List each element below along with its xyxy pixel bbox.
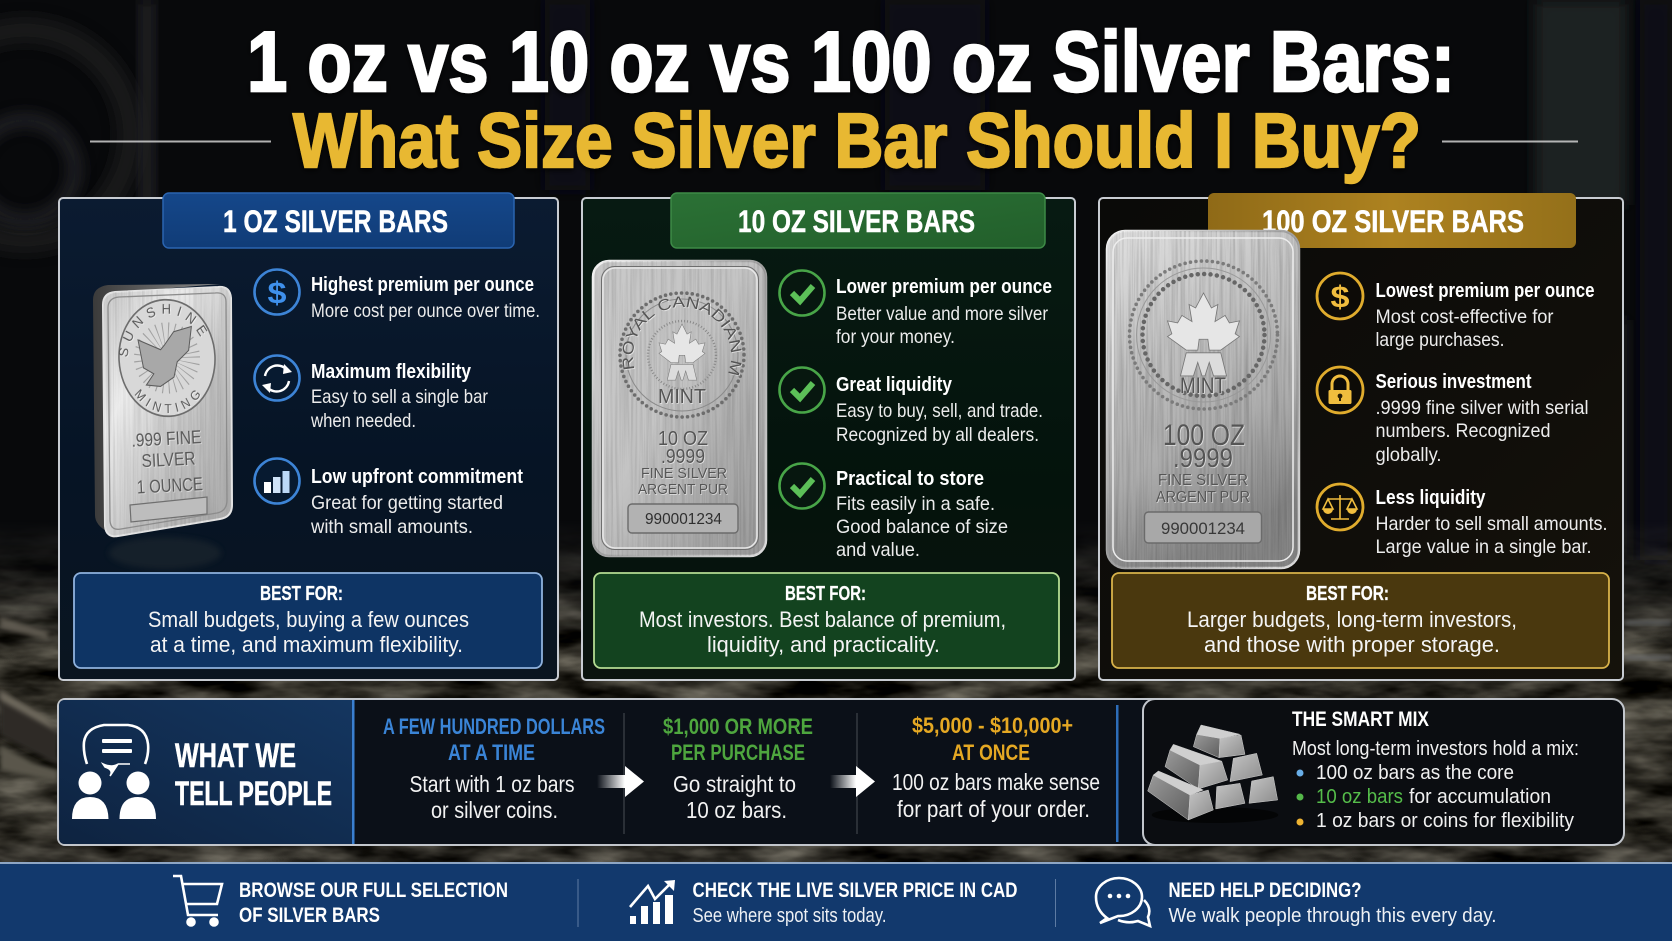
item: highest premium: More cost per ounce over time.: [311, 300, 540, 322]
icon: cart: [173, 876, 222, 926]
silver bar: 10 oz Royal Canadian Mint: .9999: [661, 446, 705, 468]
silver bar: 10 oz Royal Canadian Mint: [592, 260, 768, 558]
silver bar: 10 oz Royal Canadian Mint: 990001234: [645, 511, 722, 528]
footer: browse: BROWSE OUR FULL SELECTION: [239, 878, 508, 902]
arrow 1: [597, 766, 644, 797]
footer: live price: [630, 878, 1018, 927]
footer: live price: See where spot sits today.: [692, 905, 886, 927]
item: lowest premium: Lowest premium per ounce: [1376, 279, 1594, 302]
column: $1,000 or more: 10 oz bars.: [686, 797, 787, 823]
smart mix text: [1292, 707, 1579, 832]
item: practical to store: [780, 464, 1008, 561]
best for: 1 oz: [74, 573, 542, 668]
item: less liquidity: [1317, 484, 1608, 558]
best for: 100 oz: Larger budgets, long-term investors,: [1187, 607, 1517, 632]
item: practical to store: and value.: [836, 539, 920, 561]
silver bar: 10 oz Royal Canadian Mint: FINE SILVER: [641, 465, 727, 482]
silver bar: 1 oz Sunshine Minting: [93, 284, 233, 568]
best for: 100 oz: BEST FOR:: [1306, 582, 1389, 605]
panel heading: 100 oz: 100 OZ SILVER BARS: [1262, 203, 1524, 239]
item: lowest premium: $: [1330, 279, 1350, 314]
item: less liquidity: Less liquidity: [1376, 486, 1486, 509]
title line 1: 1 oz vs 10 oz vs 100 oz Silver Bars:: [247, 15, 1455, 110]
column: $5,000 - $10,000+: for part of your order.: [897, 796, 1090, 822]
item: lower premium: Lower premium per ounce: [836, 275, 1052, 298]
best for: 1 oz: BEST FOR:: [260, 582, 343, 605]
panel heading: 10 oz: [671, 193, 1045, 248]
item: serious investment: [1317, 367, 1588, 466]
column: few hundred dollars: or silver coins.: [431, 797, 558, 823]
smart mix text: 1 oz bars or coins for flexibility: [1316, 809, 1575, 832]
footer: browse: [173, 876, 508, 927]
item: lower premium: [780, 270, 1052, 348]
icon: stack of silver bars: [1148, 725, 1278, 823]
item: less liquidity: Large value in a single bar.: [1376, 536, 1592, 558]
item: low upfront commitment: Great for getting started: [311, 492, 503, 514]
smart mix text: Most long-term investors hold a mix:: [1292, 737, 1579, 760]
column: $1,000 or more: $1,000 OR MORE: [663, 714, 813, 739]
column: $5,000 - $10,000+: 100 oz bars make sense: [892, 769, 1100, 795]
best for: 10 oz: liquidity, and practicality.: [707, 632, 940, 657]
item: lowest premium: [1317, 273, 1594, 351]
item: great liquidity: Recognized by all dealers.: [836, 424, 1039, 446]
silver bar: 100 oz: FINE SILVER: [1158, 472, 1248, 489]
footer bar: [0, 862, 1672, 941]
column: $1,000 or more: PER PURCHASE: [671, 740, 805, 765]
best for: 10 oz: BEST FOR:: [785, 582, 866, 605]
footer: need help: We walk people through this every day.: [1168, 905, 1496, 927]
silver bar: 100 oz: 100 OZ: [1163, 419, 1245, 452]
item: highest premium: $: [268, 275, 286, 310]
arrow 2: [830, 766, 875, 797]
column: $5,000 - $10,000+: AT ONCE: [952, 740, 1030, 765]
item: practical to store: Fits easily in a safe.: [836, 493, 995, 515]
panel heading: 1 oz: [163, 193, 514, 248]
column: $1,000 or more: [663, 714, 813, 823]
item: less liquidity: Harder to sell small amounts.: [1376, 513, 1608, 535]
item: serious investment: .9999 fine silver with serial: [1376, 397, 1588, 419]
smart mix text: for accumulation: [1409, 785, 1551, 808]
item: maximum flexibility: Maximum flexibility: [311, 360, 472, 383]
panel: 1 oz silver bars: [58, 192, 559, 681]
what we tell people label: WHAT WE: [175, 737, 296, 775]
what we tell people strip: [58, 699, 1178, 845]
what we tell people label: [59, 700, 354, 844]
footer: live price: CHECK THE LIVE SILVER PRICE IN CAD: [692, 878, 1018, 902]
column: few hundred dollars: AT A TIME: [448, 740, 535, 765]
panel: the smart mix: [1143, 699, 1624, 845]
title line 2: What Size Silver Bar Should I Buy?: [293, 98, 1421, 184]
panel: 10 oz silver bars: [581, 192, 1076, 681]
silver bar: 10 oz Royal Canadian Mint: 10 OZ: [658, 428, 708, 450]
icon: chat bubbles: [1096, 878, 1150, 926]
panel heading: 10 oz: 10 OZ SILVER BARS: [738, 203, 975, 239]
silver bar: 100 oz: MINT: [1180, 373, 1226, 398]
silver bar: 100 oz: 990001234: [1161, 519, 1245, 538]
silver bar: 100 oz: .9999: [1173, 443, 1233, 473]
silver bar: 100 oz: ARGENT PUR: [1156, 489, 1250, 506]
item: great liquidity: Great liquidity: [836, 373, 953, 396]
item: highest premium: Highest premium per ounce: [311, 273, 534, 296]
best for: 1 oz: Small budgets, buying a few ounces: [148, 607, 469, 632]
item: serious investment: numbers. Recognized: [1376, 420, 1550, 442]
column: $1,000 or more: Go straight to: [673, 771, 796, 797]
silver bar: 1 oz Sunshine Minting: .999 FINE: [131, 427, 202, 451]
best for: 1 oz: at a time, and maximum flexibility.: [150, 632, 463, 657]
silver bar: 10 oz Royal Canadian Mint: ROYAL CANADIAN MINT: [622, 296, 742, 376]
item: maximum flexibility: when needed.: [310, 410, 416, 432]
panel heading: 100 oz: [1208, 193, 1576, 248]
item: great liquidity: Easy to buy, sell, and trade.: [836, 400, 1043, 422]
item: practical to store: Good balance of size: [836, 516, 1008, 538]
silver bar: 10 oz Royal Canadian Mint: ARGENT PUR: [638, 481, 728, 498]
best for: 10 oz: [594, 573, 1059, 668]
item: maximum flexibility: [254, 356, 488, 432]
column: $5,000 - $10,000+: $5,000 - $10,000+: [912, 713, 1073, 738]
best for: 10 oz: Most investors. Best balance of premium,: [639, 607, 1006, 632]
silver bar: 1 oz Sunshine Minting: MINTING: [134, 389, 200, 414]
column: few hundred dollars: [383, 714, 605, 823]
panel: 100 oz silver bars: [1099, 193, 1623, 680]
item: low upfront commitment: with small amounts.: [310, 516, 473, 538]
item: lower premium: for your money.: [836, 326, 955, 348]
column: $5,000 - $10,000+: [892, 713, 1100, 822]
item: low upfront commitment: [254, 458, 523, 538]
icon: people talking: [72, 725, 156, 819]
what we tell people label: TELL PEOPLE: [175, 775, 332, 813]
column: few hundred dollars: Start with 1 oz bars: [410, 771, 574, 797]
silver bar: 1 oz Sunshine Minting: SILVER: [141, 449, 196, 471]
item: great liquidity: [780, 368, 1043, 446]
item: lowest premium: large purchases.: [1376, 329, 1504, 351]
best for: 100 oz: [1112, 573, 1609, 668]
smart mix text: 10 oz bars: [1316, 785, 1403, 808]
footer: browse: OF SILVER BARS: [239, 903, 380, 927]
icon: rising chart: [630, 880, 675, 924]
item: lowest premium: Most cost-effective for: [1376, 306, 1554, 328]
silver bar: 1 oz Sunshine Minting: SUNSHINE: [119, 304, 208, 358]
item: highest premium: [254, 270, 540, 322]
item: serious investment: globally.: [1376, 444, 1442, 466]
silver bar: 1 oz Sunshine Minting: 1 OUNCE: [136, 474, 203, 498]
item: practical to store: Practical to store: [836, 467, 984, 490]
footer: need help: NEED HELP DECIDING?: [1168, 878, 1362, 902]
title: [247, 15, 1455, 184]
panel heading: 1 oz: 1 OZ SILVER BARS: [223, 203, 448, 239]
item: maximum flexibility: Easy to sell a single bar: [311, 386, 488, 408]
footer: need help: [1096, 878, 1496, 927]
silver bar: 10 oz Royal Canadian Mint: MINT: [658, 386, 706, 408]
column: few hundred dollars: A FEW HUNDRED DOLLARS: [383, 714, 605, 739]
item: lower premium: Better value and more silver: [836, 303, 1048, 325]
best for: 100 oz: and those with proper storage.: [1204, 632, 1500, 657]
silver bar: 100 oz: [1107, 231, 1299, 568]
item: serious investment: Serious investment: [1376, 370, 1532, 393]
smart mix text: THE SMART MIX: [1292, 707, 1430, 731]
item: low upfront commitment: Low upfront commitment: [311, 465, 523, 488]
smart mix text: 100 oz bars as the core: [1316, 761, 1514, 784]
